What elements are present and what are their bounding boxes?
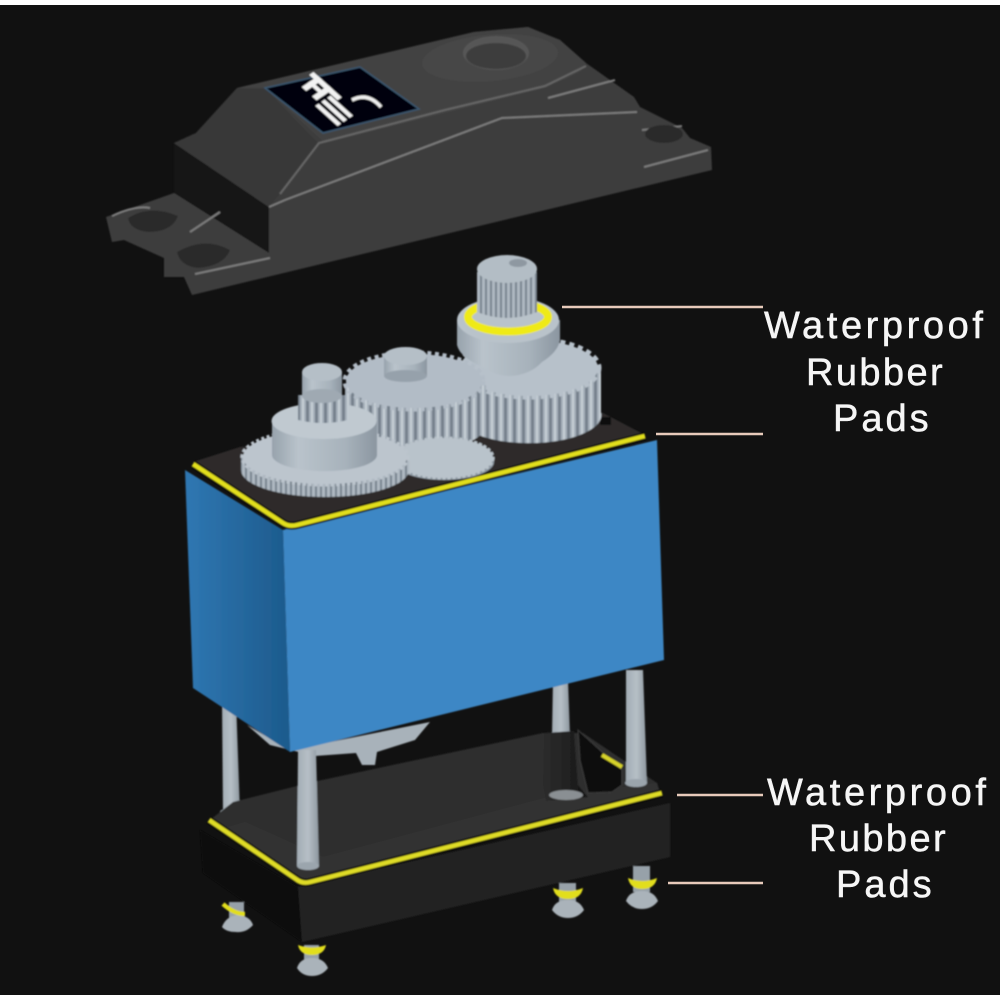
foot rear left <box>222 902 253 932</box>
output spline <box>477 255 537 318</box>
rear post <box>543 731 588 801</box>
servo artwork <box>106 27 712 976</box>
hub recess <box>420 29 560 87</box>
logo plate <box>265 67 419 133</box>
foot right middle <box>552 883 584 918</box>
rear screws <box>220 680 570 816</box>
tray floor <box>210 733 660 880</box>
middle gear <box>345 354 486 452</box>
blue housing <box>185 440 664 752</box>
label: upper waterproof rubber pads: Rubber <box>806 352 945 394</box>
callout lines <box>562 307 763 883</box>
label: upper waterproof rubber pads: Waterproof <box>764 305 987 347</box>
label: lower waterproof rubber pads: Rubber <box>809 818 948 860</box>
label: upper waterproof rubber pads <box>764 305 987 440</box>
cover top face <box>237 27 586 143</box>
post on pinion <box>302 363 342 403</box>
rear wall <box>578 730 622 793</box>
small yellow seal <box>602 755 622 767</box>
flat lower gear <box>394 438 494 480</box>
lower case tray <box>200 730 670 942</box>
housing left face <box>185 470 290 752</box>
cover sloped end <box>174 88 318 207</box>
label: lower waterproof rubber pads: Pads <box>836 864 935 906</box>
cover dark end face <box>174 143 269 253</box>
label: upper waterproof rubber pads: Pads <box>833 398 932 440</box>
gear train <box>241 255 601 497</box>
foot right <box>626 866 658 909</box>
top plate and seal <box>193 413 645 526</box>
label: lower waterproof rubber pads <box>767 772 990 906</box>
top cover <box>106 27 712 295</box>
foot screws with rubber rings <box>222 866 658 976</box>
cover silhouette <box>106 27 712 295</box>
motor under the housing <box>247 722 430 765</box>
post on middle gear <box>384 347 427 382</box>
left mounting holes <box>128 210 178 232</box>
base left face <box>200 830 302 942</box>
pinion <box>298 395 348 423</box>
front and right screws <box>297 670 647 870</box>
right mounting tab <box>645 125 683 143</box>
base front face <box>298 803 670 942</box>
foot front <box>297 945 328 976</box>
cylinder on lower gear <box>272 403 377 471</box>
output collar <box>457 297 560 376</box>
tray front rim <box>225 783 660 880</box>
yellow rubber ring <box>468 302 548 332</box>
cover edge highlights <box>112 66 708 274</box>
label: lower waterproof rubber pads: Waterproof <box>767 772 990 814</box>
rubber seal base <box>209 793 662 883</box>
large output gear <box>457 340 601 443</box>
wide lower gear <box>241 430 409 497</box>
housing front face <box>283 440 664 752</box>
